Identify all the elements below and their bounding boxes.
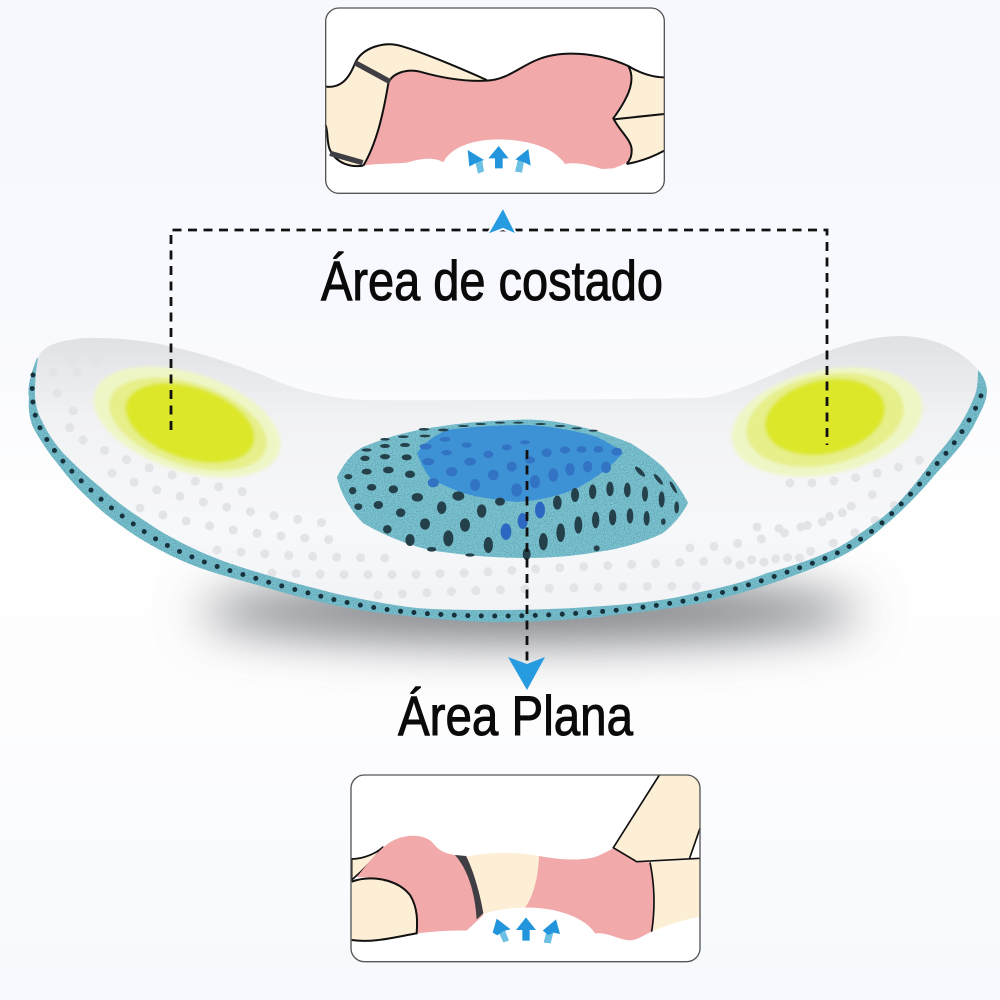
right yellow zone	[721, 351, 933, 493]
pillow edge: teal mesh	[28, 358, 987, 622]
shadow under pillow	[200, 582, 860, 642]
heading: Área Plana: Área Plana	[398, 684, 634, 747]
side body pink zone	[363, 54, 632, 169]
icon: three lift arrows	[468, 146, 531, 174]
pillow top surface	[35, 336, 978, 610]
arrow down	[508, 657, 545, 690]
arrow up	[487, 207, 517, 235]
pillow	[28, 336, 987, 622]
blue memory-foam core	[417, 425, 623, 502]
panel: back-sleeping illustration	[351, 775, 700, 962]
left yellow zone	[80, 345, 294, 499]
central dome: teal mesh	[337, 420, 688, 560]
icon: three lift arrows	[493, 917, 560, 943]
dashed connector: side area	[171, 230, 827, 445]
dome perforations	[344, 422, 679, 560]
heading: Área de costado: Área de costado	[321, 249, 663, 312]
panel: side-sleeping illustration	[326, 8, 664, 193]
torso pink zone	[525, 848, 654, 940]
dashed connector: flat area	[526, 450, 528, 662]
surface perforation dots	[53, 362, 920, 595]
